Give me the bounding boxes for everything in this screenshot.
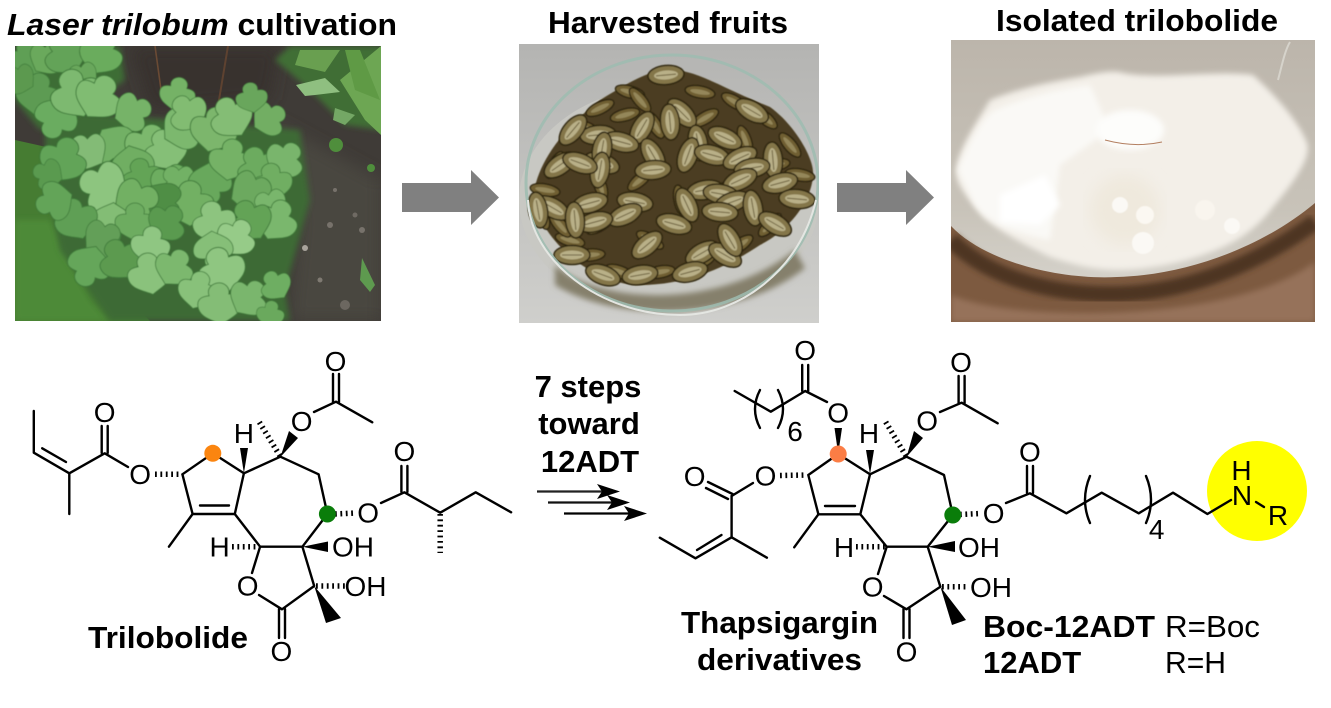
atom labels: trilobolide: H [234,418,254,449]
atom labels: thapsigargin: R [1268,500,1288,531]
chemical structure: thapsigargin derivative [660,335,1288,668]
atom labels: trilobolide: O [94,397,116,428]
legend: compound names and R groups: Boc-12ADT [983,609,1155,644]
atom labels: trilobolide: O [271,636,292,667]
label: Trilobolide: Trilobolide [88,620,248,655]
atom labels: thapsigargin: O [1019,436,1041,468]
atom labels: trilobolide: O [237,570,258,602]
atom labels: thapsigargin: 6 [787,416,803,447]
marker: green carbon [319,506,336,522]
legend: compound names and R groups: R=Boc [1165,609,1260,644]
legend: compound names and R groups: 12ADT [983,645,1081,680]
label: Thapsigargin derivatives [681,605,878,677]
atom labels: trilobolide: O [129,459,151,490]
atom labels: thapsigargin: H [1231,455,1252,486]
marker: green carbon [944,506,961,524]
atom labels: thapsigargin: O [862,572,883,602]
label: Thapsigargin derivatives: derivatives [697,642,862,677]
atom labels: thapsigargin: O [755,460,776,492]
bonds: thapsigargin skeleton [660,365,1264,638]
atom labels: thapsigargin: O [916,406,938,436]
atom labels: thapsigargin: OH [970,572,1012,603]
marker: orange carbon [830,446,847,462]
atom labels: thapsigargin: H [859,418,879,449]
legend: compound names and R groups [983,609,1260,680]
atom labels: trilobolide: O [325,346,346,377]
reaction label: 7 steps toward 12ADT: 7 steps [535,369,641,404]
title: Isolated trilobolide: Isolated trilobolide [996,3,1278,38]
reaction label: 7 steps toward 12ADT: 12ADT [541,444,639,479]
atom labels: thapsigargin: OH [958,532,1000,563]
atom labels: thapsigargin: O [950,347,972,378]
atom labels: thapsigargin: O [896,636,917,668]
reaction label: 7 steps toward 12ADT [535,369,641,479]
bonds: trilobolide skeleton [34,374,511,638]
arrow: cultivation to fruits [402,170,499,225]
atom labels: thapsigargin: N [1232,480,1252,511]
atom labels: trilobolide: O [291,406,313,437]
title: Harvested fruits: Harvested fruits [548,5,788,40]
legend: compound names and R groups: R=H [1165,645,1226,680]
atom labels: thapsigargin: O [794,335,816,366]
atom labels: thapsigargin: O [827,398,849,428]
atom labels: thapsigargin: O [684,461,705,492]
highlight: yellow amine circle [1207,441,1307,541]
atom labels: thapsigargin: H [834,532,854,563]
atom labels: trilobolide: H [209,532,230,562]
atom labels: trilobolide: O [394,436,415,467]
atom labels: thapsigargin: 4 [1149,514,1164,545]
title: Laser trilobum cultivation: Laser trilobum cultivation [7,7,397,42]
photo: Laser trilobum plant in garden bed [15,46,381,321]
atom labels: trilobolide: O [357,498,379,528]
label: Thapsigargin derivatives: Thapsigargin [681,605,878,640]
atom labels: trilobolide [94,346,415,667]
photo: harvested fruits in a glass dish [519,44,819,323]
photo: isolated white trilobolide powder in a bowl [951,40,1315,322]
atom labels: thapsigargin: O [983,498,1005,529]
arrow: fruits to isolated compound [837,170,934,225]
atom labels: trilobolide: OH [332,532,374,562]
atom labels: trilobolide: OH [344,571,386,602]
marker: orange carbon [204,445,221,462]
reaction arrows: three sequential steps [537,484,647,521]
atom labels: thapsigargin [684,335,1288,668]
reaction label: 7 steps toward 12ADT: toward [538,406,640,441]
chemical structure: trilobolide [34,346,511,667]
